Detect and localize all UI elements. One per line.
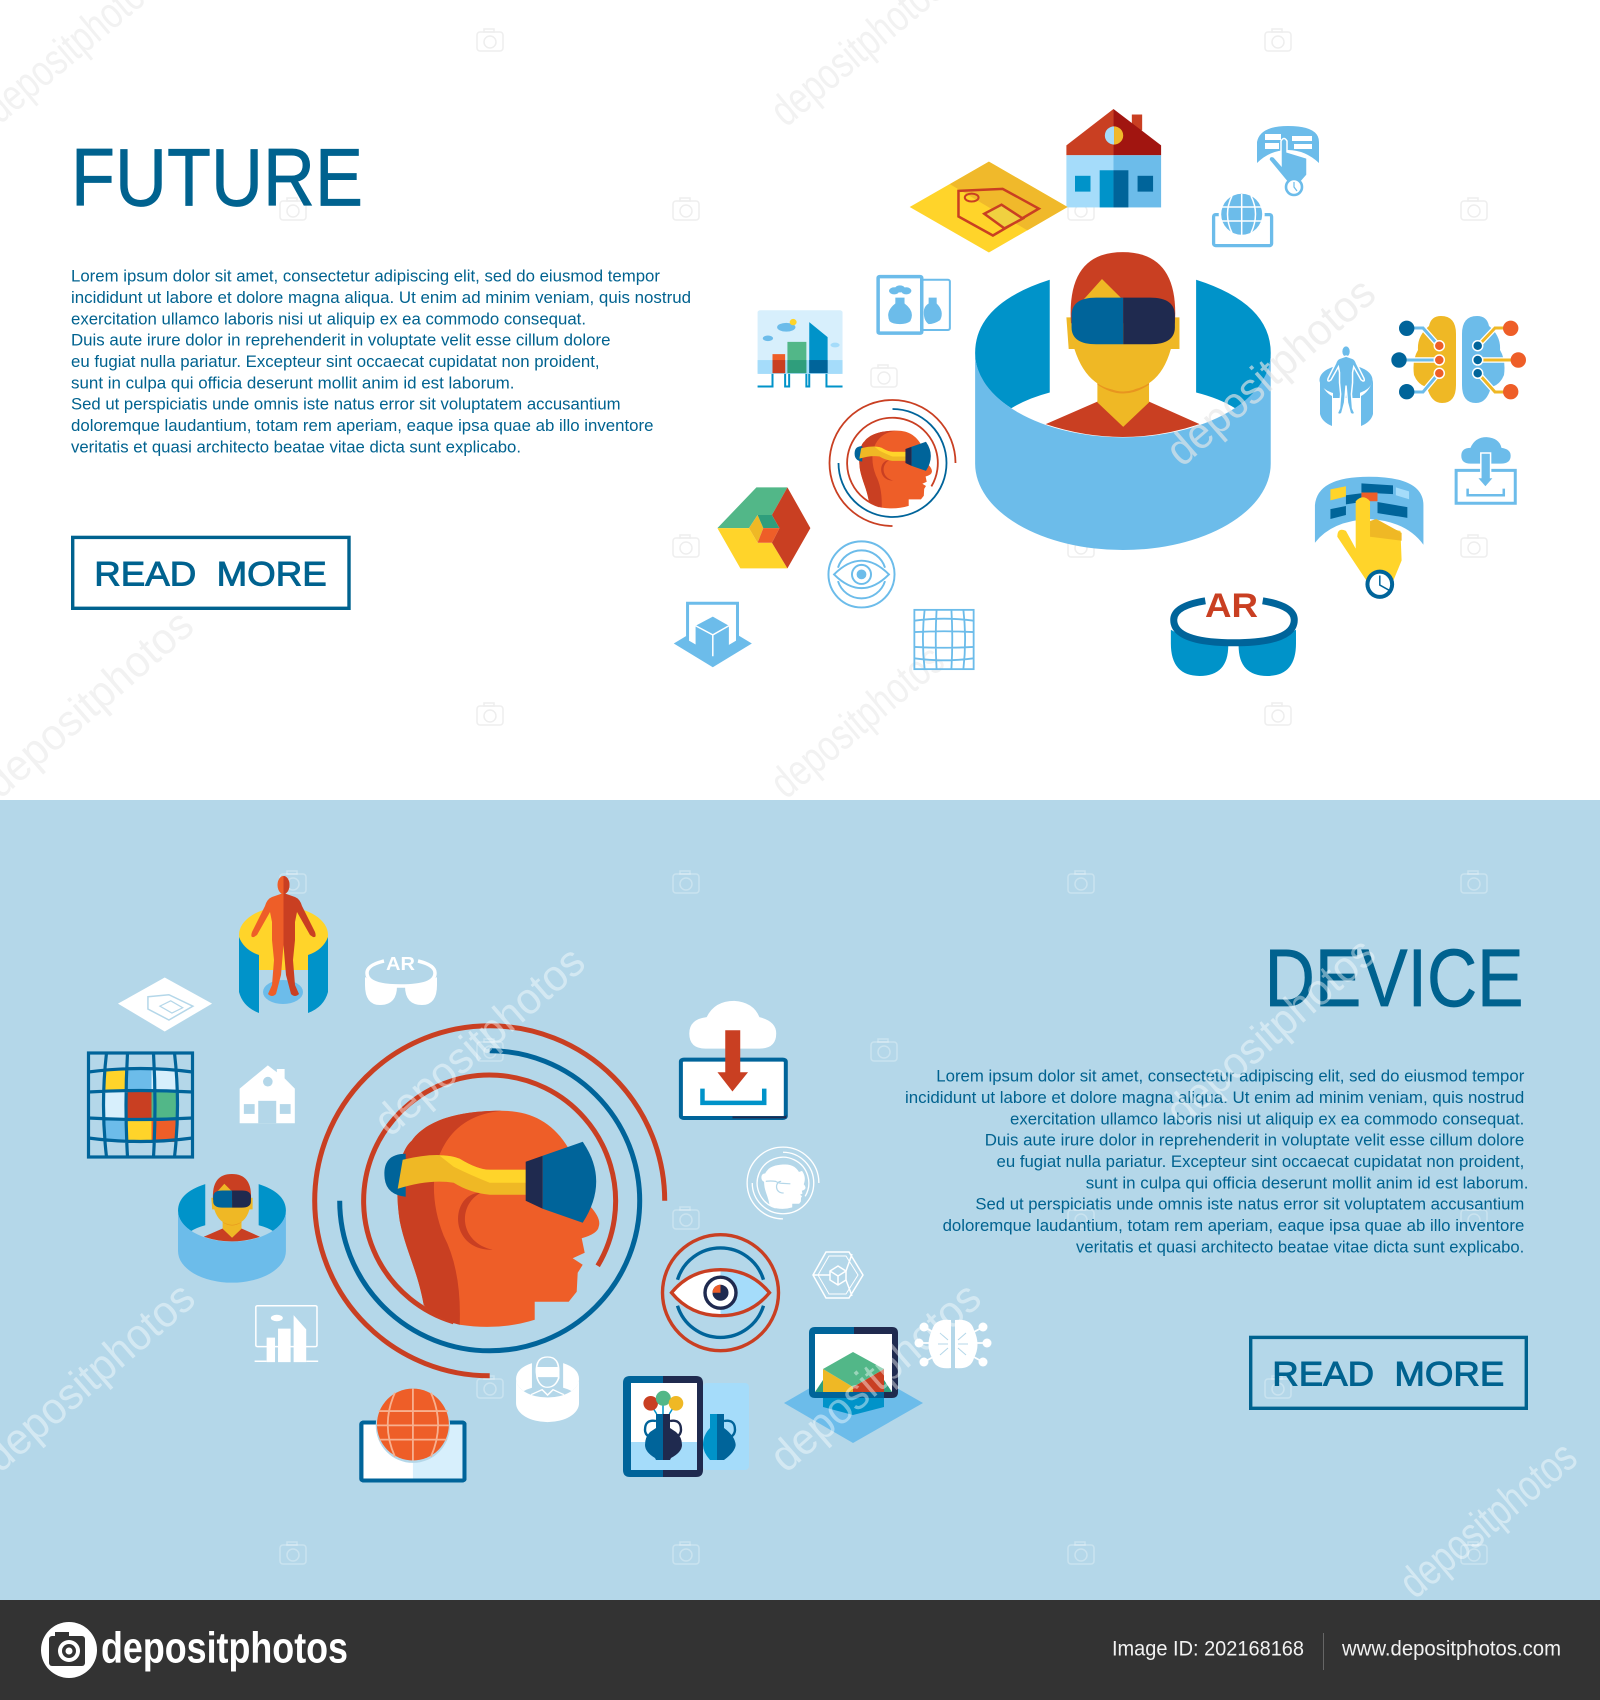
icon: VR head with rings bbox=[830, 400, 956, 526]
text block: future: Duis aute irure dolor in reprehenderit in voluptate velit esse cillum dolore bbox=[71, 331, 610, 350]
text block: device: veritatis et quasi architecto beatae vitae dicta sunt explicabo. bbox=[1076, 1237, 1524, 1256]
icon: distorted colour grid bbox=[88, 1053, 192, 1157]
icon: white AR glasses bbox=[365, 954, 437, 1005]
footer bar bbox=[0, 1600, 1600, 1700]
icon: person in VR cylinder bbox=[975, 252, 1271, 550]
icon: brain circuit bbox=[1391, 316, 1526, 403]
icon: globe on tablet bbox=[361, 1388, 464, 1481]
icon: large VR head with rings bbox=[315, 1026, 665, 1376]
icon: white hexagon cube bbox=[813, 1252, 863, 1298]
watermark: logos on blue: depositphotos bbox=[364, 937, 594, 1146]
icon: 3D cube on platform bbox=[674, 603, 752, 667]
text block: future: eu fugiat nulla pariatur. Excepteur sint occaecat cupidatat non proident, bbox=[71, 352, 600, 371]
icon: distorted grid bbox=[914, 610, 974, 669]
icon: white AR glasses: AR bbox=[386, 954, 415, 974]
button: read more bbox=[73, 537, 349, 608]
button: read more: READ MORE bbox=[1272, 1355, 1504, 1393]
text block: device: sunt in culpa qui officia deserunt mollit anim id est laborum. bbox=[1086, 1173, 1528, 1192]
watermark: camera marks and logos on white bbox=[0, 0, 1487, 808]
text block: future: doloremque laudantium, totam rem aperiam, eaque ipsa quae ab illo inventore bbox=[71, 416, 654, 435]
icon: AR glasses: AR bbox=[1205, 587, 1258, 625]
heading: future: FUTURE bbox=[71, 133, 363, 224]
watermark: logo across cylinder: depositphotos bbox=[1156, 268, 1385, 476]
icon: curved screen with pointing hand bbox=[1315, 477, 1423, 599]
text block: future: Lorem ipsum dolor sit amet, consectetur adipiscing elit, sed do eiusmod tempor bbox=[71, 267, 660, 286]
icon: cloud download bbox=[1456, 437, 1515, 503]
button: read more bbox=[1251, 1337, 1526, 1408]
icon: white plan diamond bbox=[118, 978, 212, 1031]
watermark: logos on blue: depositphotos bbox=[760, 1273, 990, 1482]
heading: device: DEVICE bbox=[1265, 933, 1524, 1024]
icon: person in body scan cylinder bbox=[239, 876, 328, 1013]
text block: future bbox=[71, 267, 691, 456]
text block: device: exercitation ullamco laboris nisi ut aliquip ex ea commodo consequat. bbox=[1010, 1109, 1524, 1128]
text block: device: doloremque laudantium, totam rem aperiam, eaque ipsa quae ab illo inventore bbox=[943, 1216, 1524, 1235]
icon: cloud download to tablet bbox=[681, 1001, 786, 1118]
text block: device: Duis aute irure dolor in reprehenderit in voluptate velit esse cillum dolore bbox=[985, 1131, 1524, 1150]
text block: future: Sed ut perspiciatis unde omnis iste natus error sit voluptatem accusantium bbox=[71, 395, 621, 414]
icon: small person in VR cylinder bbox=[178, 1174, 286, 1283]
text block: future: sunt in culpa qui officia deserunt mollit anim id est laborum. bbox=[71, 373, 514, 392]
icon: colour cube bbox=[717, 487, 810, 568]
icon: house bbox=[1066, 109, 1161, 207]
icon: camera logo bbox=[41, 1622, 97, 1678]
icon: white head with rings bbox=[747, 1147, 819, 1219]
icon: white city chart bbox=[255, 1306, 318, 1362]
text block: device: Sed ut perspiciatis unde omnis iste natus error sit voluptatem accusantium bbox=[975, 1195, 1524, 1214]
text block: future: incididunt ut labore et dolore magna aliqua. Ut enim ad minim veniam, quis nostrud bbox=[71, 288, 691, 307]
watermark: camera marks on blue bbox=[280, 871, 1487, 1564]
icon: white person cylinder bbox=[516, 1357, 579, 1422]
watermark: camera marks and logos on white: depositphotos bbox=[761, 635, 953, 808]
watermark: logos on blue: depositphotos bbox=[1156, 928, 1385, 1136]
icon: body scan cylinder bbox=[1320, 346, 1373, 426]
icon: AR glasses bbox=[1171, 587, 1296, 676]
icon: vases on tablet bbox=[623, 1376, 749, 1477]
text block: device: eu fugiat nulla pariatur. Excepteur sint occaecat cupidatat non proident, bbox=[996, 1152, 1524, 1171]
icon: house plan diamond bbox=[910, 162, 1068, 253]
icon: white brain circuit bbox=[914, 1320, 992, 1368]
text block: future: exercitation ullamco laboris nisi ut aliquip ex ea commodo consequat. bbox=[71, 309, 586, 328]
logo wordmark: depositphotos bbox=[101, 1624, 348, 1673]
icon: cube tablet on platform bbox=[784, 1327, 923, 1443]
icon: eye in circles bbox=[828, 541, 895, 607]
image id: Image ID: 202168168 bbox=[1112, 1638, 1304, 1661]
icon: globe on tablet bbox=[1214, 191, 1272, 246]
button: read more: READ MORE bbox=[94, 555, 327, 593]
icon: vases on tablet bbox=[878, 277, 950, 333]
text block: device: incididunt ut labore et dolore magna aliqua. Ut enim ad minim veniam, quis nostrud bbox=[905, 1088, 1524, 1107]
icon: eye in rings bbox=[662, 1235, 778, 1351]
icon: city bar chart bbox=[758, 310, 843, 387]
panel: future bbox=[0, 0, 1600, 808]
text block: device: Lorem ipsum dolor sit amet, consectetur adipiscing elit, sed do eiusmod tempor bbox=[936, 1067, 1525, 1086]
panel: device bbox=[0, 800, 1600, 1608]
watermark: logos on blue bbox=[0, 928, 1586, 1608]
icon: touch screen with clock bbox=[1257, 126, 1319, 195]
text block: device bbox=[905, 1067, 1528, 1256]
icon: white house bbox=[240, 1065, 295, 1123]
website: www.depositphotos.com bbox=[1341, 1638, 1561, 1661]
text block: future: veritatis et quasi architecto beatae vitae dicta sunt explicabo. bbox=[71, 437, 521, 456]
